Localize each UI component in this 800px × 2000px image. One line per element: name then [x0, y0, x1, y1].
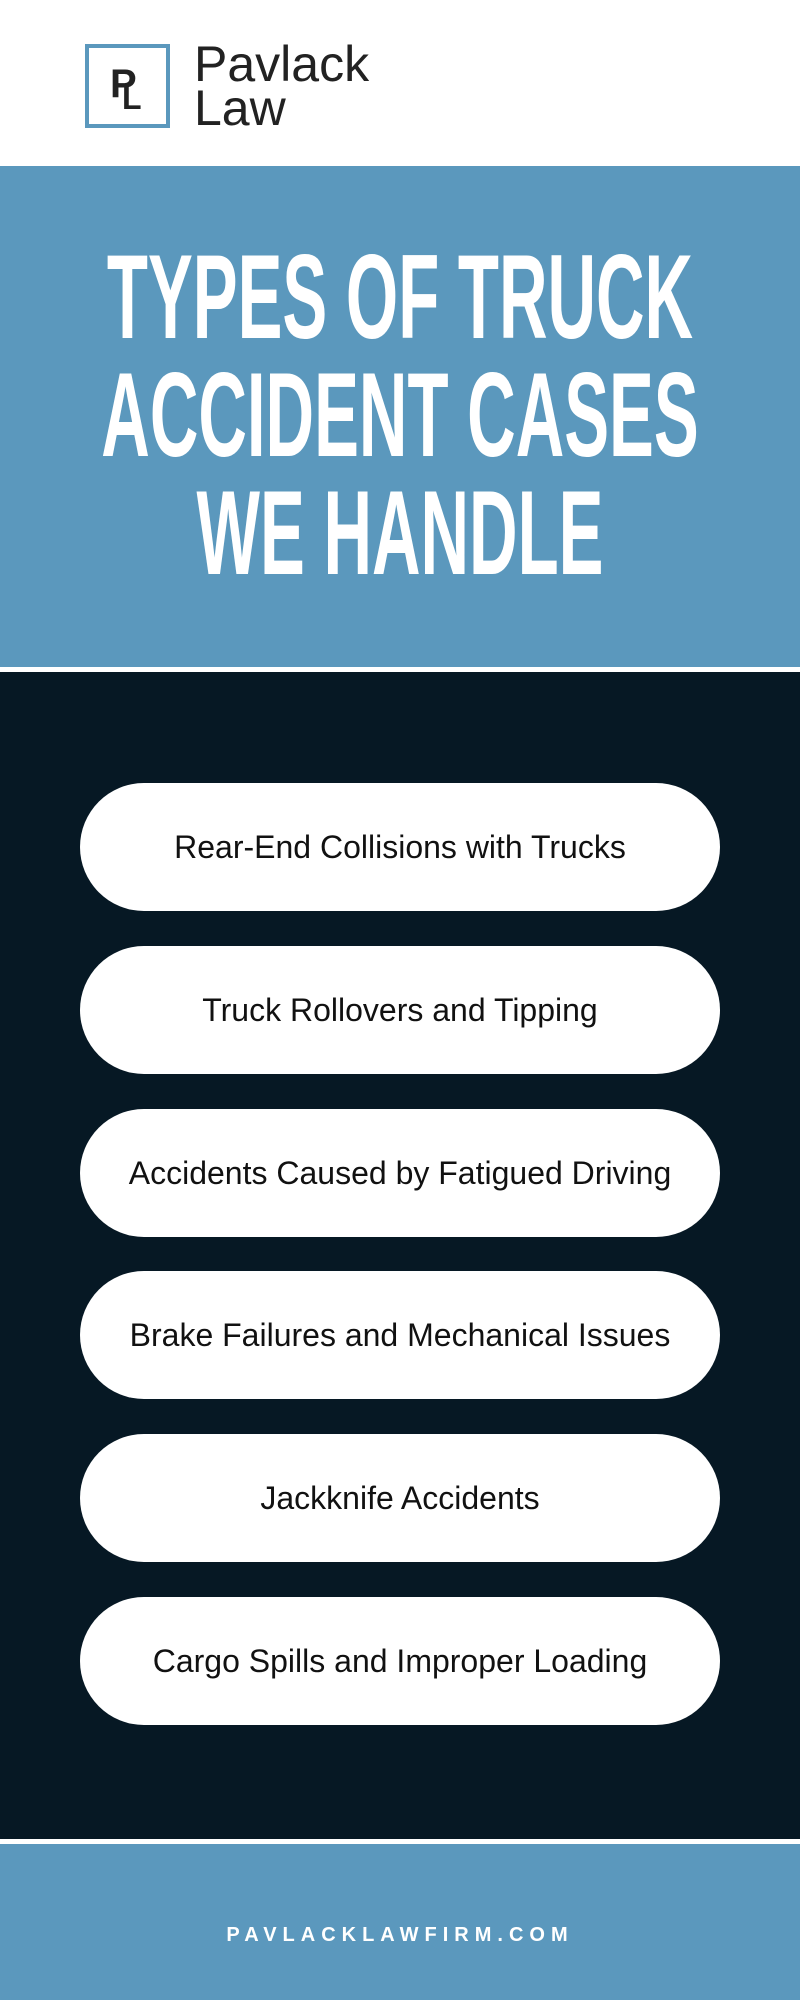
title: WE HANDLE [197, 466, 603, 600]
header: logo [85, 36, 370, 136]
pill: cargo [80, 1597, 720, 1725]
logo text: Pavlack [194, 36, 369, 92]
title band [0, 166, 800, 667]
panel: case types [0, 672, 800, 1839]
pill: fatigued: Accidents Caused by Fatigued Driving [129, 1154, 671, 1190]
icon: logo mark: L [122, 80, 142, 116]
icon: logo mark: P [110, 62, 137, 106]
footer url: PAVLACKLAWFIRM.COM [226, 1924, 574, 1946]
pill: rear-end: Rear-End Collisions with Trucks [174, 828, 626, 864]
footer [0, 1844, 800, 2000]
pill: brakes [80, 1271, 720, 1399]
pill: jackknife: Jackknife Accidents [260, 1480, 540, 1516]
title: TYPES OF TRUCK [107, 230, 693, 364]
pill: brakes: Brake Failures and Mechanical Issues [130, 1316, 670, 1352]
title: ACCIDENT CASES [101, 348, 699, 482]
pill: cargo: Cargo Spills and Improper Loading [153, 1642, 647, 1678]
logo text: Law [194, 80, 286, 136]
icon: logo mark [85, 44, 170, 128]
logo text [194, 36, 370, 136]
pill: rear-end [80, 783, 720, 911]
pill: fatigued [80, 1109, 720, 1237]
pill: jackknife [80, 1434, 720, 1562]
pill: rollovers [80, 946, 720, 1074]
title [101, 230, 699, 600]
pill: rollovers: Truck Rollovers and Tipping [202, 992, 598, 1028]
